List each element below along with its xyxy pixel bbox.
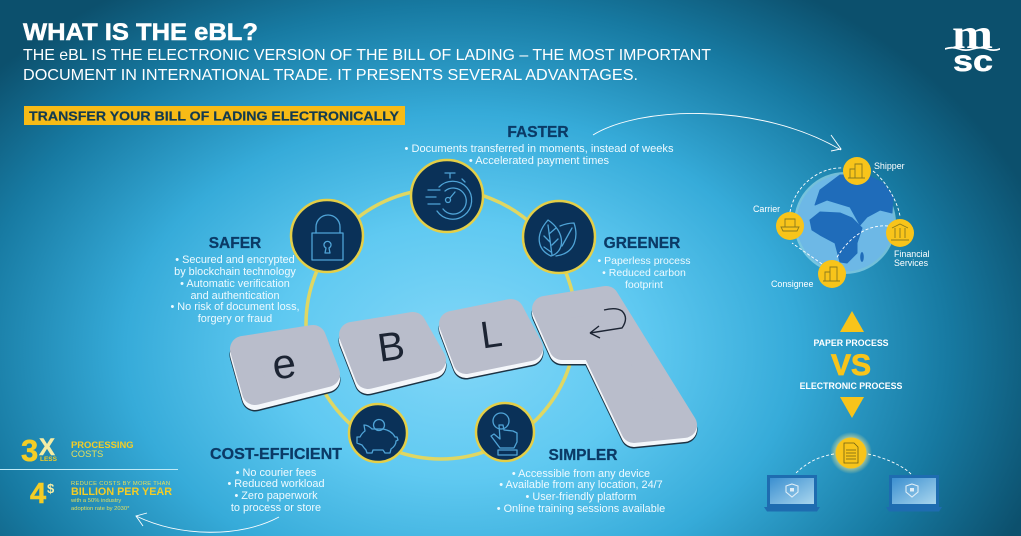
- key: B: [352, 323, 433, 382]
- node: consignee: [771, 260, 846, 289]
- stat: 3x less processing costs: [21, 433, 134, 468]
- text block: simpler: [497, 447, 665, 515]
- intro text: [23, 47, 711, 84]
- text block: safer: by blockchain technology: [174, 266, 296, 278]
- title: WHAT IS THE eBL?: [23, 19, 258, 46]
- keyboard keys: [243, 299, 684, 435]
- text block: faster: • Accelerated payment times: [469, 155, 610, 167]
- text block: simpler: • Available from any location, 24/7: [499, 479, 663, 491]
- icon: laptop right: [886, 475, 942, 512]
- text block: greener: [598, 235, 690, 291]
- node: financial services: [886, 219, 930, 268]
- stat: 4 billion savings: with a 50% industry: [70, 498, 121, 504]
- text block: faster: [404, 124, 674, 167]
- key: B: B: [375, 323, 407, 371]
- text block: safer: • Secured and encrypted: [175, 254, 295, 266]
- globe: [794, 172, 896, 274]
- electronic exchange diagram: [764, 432, 942, 512]
- stat: 3x less processing costs: LESS: [40, 456, 58, 463]
- arrow: cost-efficient to savings: [136, 513, 279, 532]
- intro text: DOCUMENT IN INTERNATIONAL TRADE. IT PRESENTS SEVERAL ADVANTAGES.: [23, 67, 638, 84]
- banner: transfer your bill of lading: TRANSFER YOUR BILL OF LADING ELECTRONICALLY: [29, 108, 399, 124]
- globe network diagram: [753, 157, 930, 289]
- vs label: VS: [831, 349, 871, 382]
- text block: cost-efficient: • Zero paperwork: [234, 490, 318, 502]
- icon: padlock (safer): [291, 200, 363, 272]
- node: shipper: Shipper: [874, 161, 905, 171]
- stat: 4 billion savings: BILLION PER YEAR: [71, 486, 172, 498]
- icon: pointing hand (simpler): [476, 403, 534, 461]
- text block: faster: • Documents transferred in moments, instead of weeks: [404, 143, 674, 155]
- key: enter: [545, 299, 684, 435]
- text block: faster: FASTER: [507, 124, 569, 141]
- connecting arrows: [795, 454, 911, 474]
- text block: greener: • Paperless process: [598, 255, 690, 267]
- intro text: THE eBL IS THE ELECTRONIC VERSION OF THE BILL OF LADING – THE MOST IMPORTANT: [23, 47, 711, 64]
- node: shipper: [843, 157, 905, 185]
- stat: 3x less processing costs: COSTS: [71, 448, 103, 459]
- key: L: L: [478, 313, 505, 357]
- text block: simpler: • Online training sessions available: [497, 503, 665, 515]
- key: e: [243, 338, 327, 398]
- stat: 3x less processing costs: X: [39, 434, 55, 461]
- logo: MSC: m: [952, 12, 993, 58]
- text block: safer: SAFER: [209, 235, 261, 252]
- key: e: e: [269, 339, 299, 389]
- text block: safer: • No risk of document loss,: [170, 301, 300, 313]
- paper process label: PAPER PROCESS: [813, 338, 889, 348]
- stat: 3x less processing costs: PROCESSING: [71, 439, 134, 450]
- node: carrier: [753, 204, 804, 240]
- text block: greener: footprint: [625, 279, 663, 291]
- node: consignee: Consignee: [771, 279, 813, 289]
- divider: [0, 469, 178, 470]
- icon: document: [830, 432, 872, 474]
- text block: simpler: • Accessible from any device: [512, 468, 650, 480]
- text block: cost-efficient: to process or store: [231, 502, 321, 514]
- text block: greener: • Reduced carbon: [602, 267, 686, 279]
- stat: 4 billion savings: [30, 478, 172, 512]
- text block: cost-efficient: [210, 446, 343, 514]
- text block: safer: forgery or fraud: [198, 313, 272, 325]
- text block: safer: [170, 235, 300, 325]
- text block: greener: GREENER: [604, 235, 680, 252]
- stat: 4 billion savings: adoption rate by 2030*: [71, 506, 130, 512]
- icon: piggy bank (cost-efficient): [349, 404, 407, 462]
- ring connecting benefits: [306, 189, 576, 459]
- text block: safer: and authentication: [190, 290, 280, 302]
- stat: 3x less processing costs: 3: [21, 433, 38, 468]
- arrow: faster to globe: [593, 113, 841, 151]
- node: financial services: Services: [894, 258, 929, 268]
- electronic process label: ELECTRONIC PROCESS: [800, 381, 902, 391]
- node: carrier: Carrier: [753, 204, 780, 214]
- text block: simpler: • User-friendly platform: [526, 491, 636, 503]
- stat: 4 billion savings: REDUCE COSTS BY MORE THAN: [71, 481, 170, 487]
- node: financial services: Financial: [894, 249, 930, 259]
- icon: leaves (greener): [523, 201, 595, 273]
- text block: safer: • Automatic verification: [180, 278, 290, 290]
- triangle up: [840, 311, 864, 332]
- stat: 4 billion savings: 4: [30, 478, 46, 510]
- text block: cost-efficient: • Reduced workload: [227, 478, 325, 490]
- logo: MSC: sc: [953, 45, 993, 78]
- triangle down: [840, 397, 864, 418]
- key: L: [452, 312, 530, 366]
- network arrows: [790, 168, 900, 264]
- text block: cost-efficient: • No courier fees: [236, 467, 317, 479]
- text block: cost-efficient: COST-EFFICIENT: [210, 446, 343, 463]
- text block: simpler: SIMPLER: [549, 447, 617, 464]
- icon: laptop left: [764, 475, 820, 512]
- stat: 4 billion savings: $: [47, 481, 55, 496]
- icon: stopwatch (faster): [411, 160, 483, 232]
- logo: MSC: [945, 12, 1000, 78]
